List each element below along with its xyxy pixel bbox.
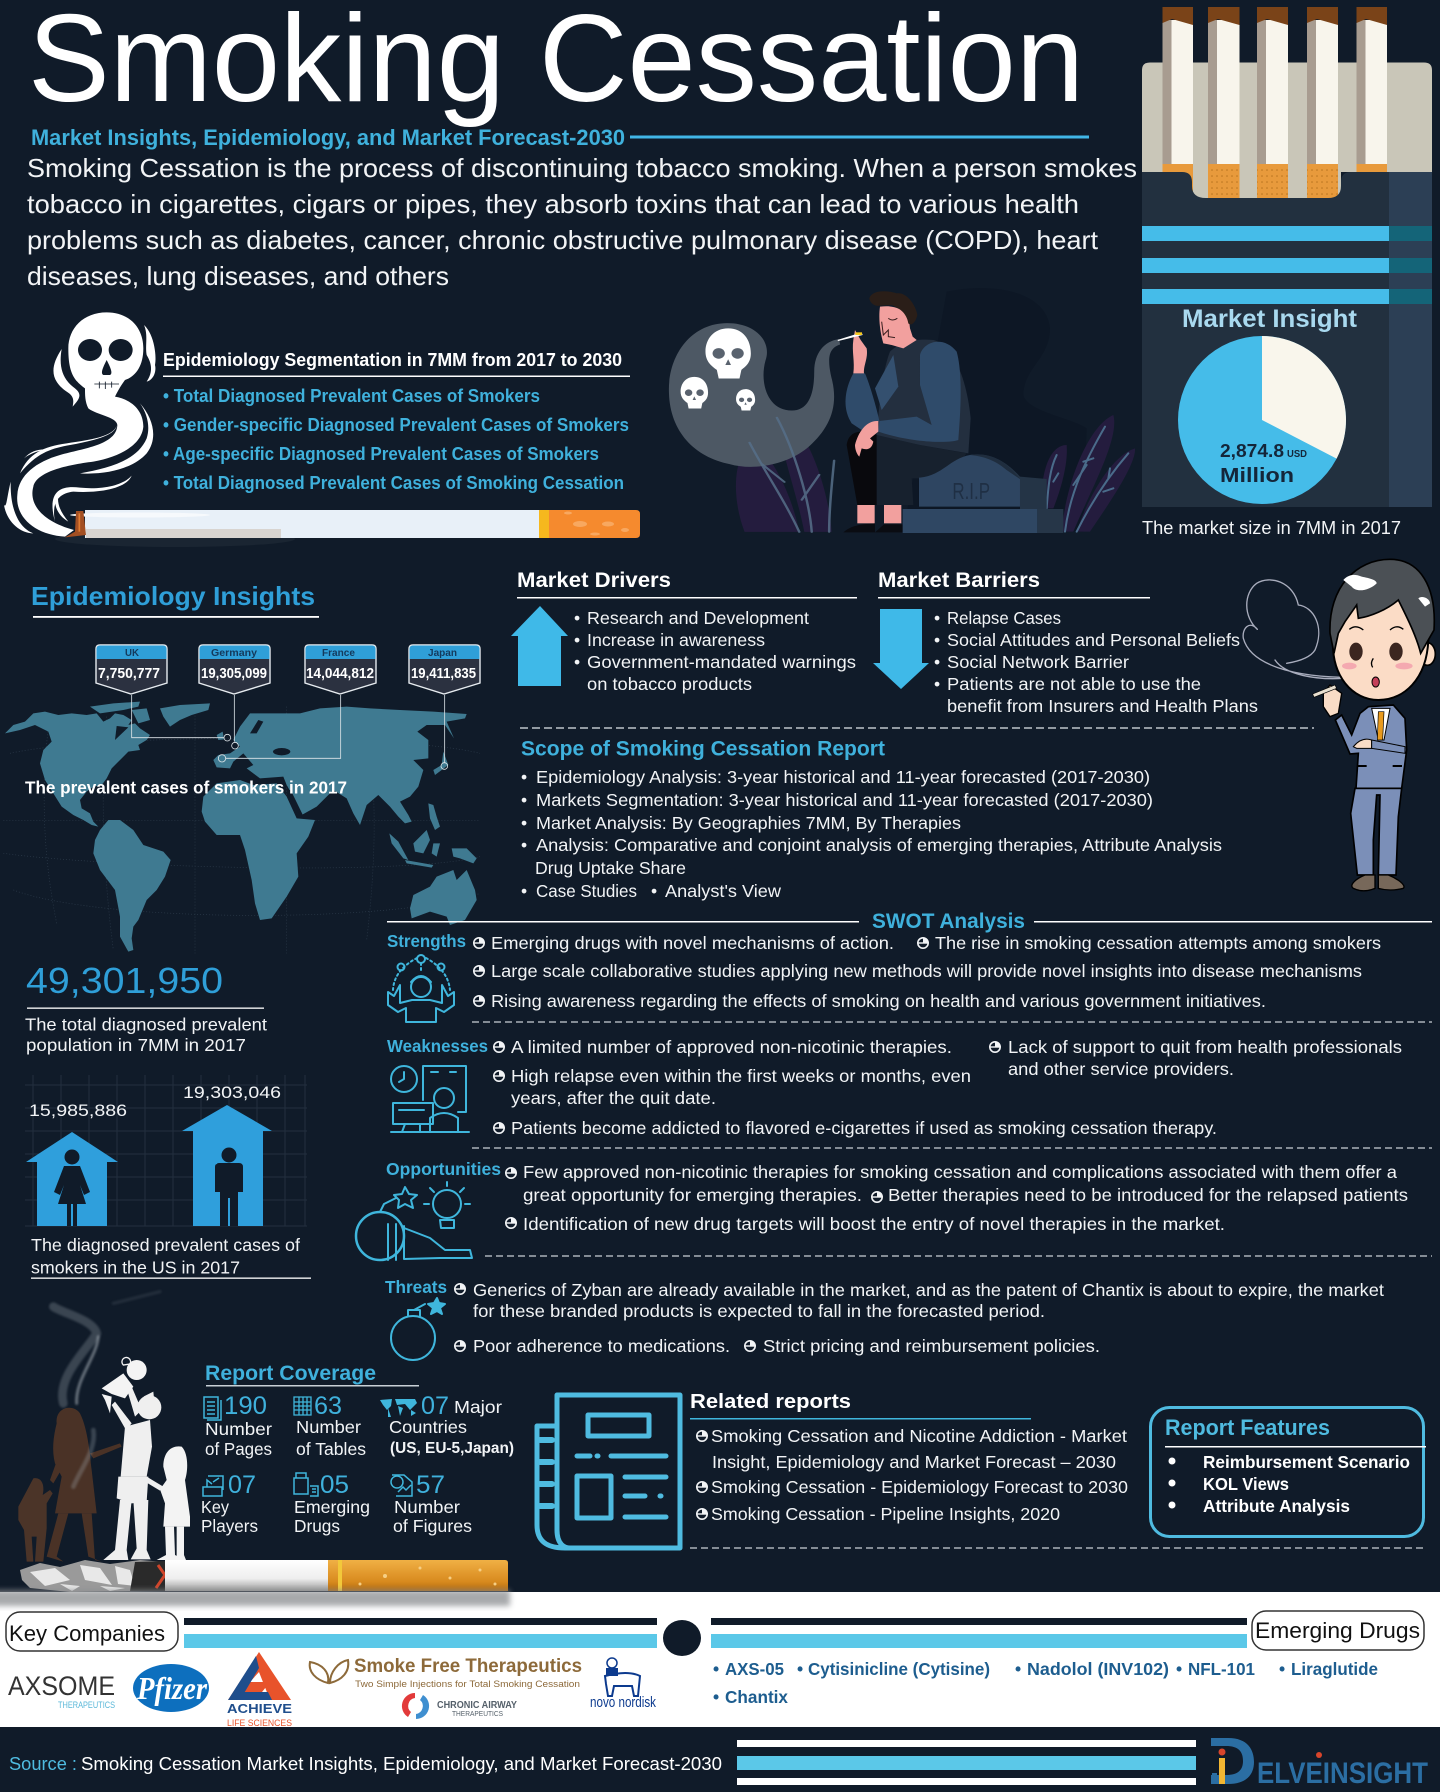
divider bars: [184, 1618, 1247, 1656]
logo: Achieve: ACHIEVE: [227, 1701, 292, 1716]
panel: threats: Threats: [385, 1277, 447, 1297]
list: related reports: [697, 1426, 1128, 1524]
list: scope of report: •: [521, 881, 527, 901]
callout: UK: 7,750,777: [98, 666, 160, 682]
list: scope of report: Epidemiology Analysis: 3-year historical and 11-year forecasted (2017-2030): [536, 767, 1150, 787]
stat: tables: [294, 1392, 366, 1459]
panel: threats: for these branded products is expected to fall in the forecasted period.: [473, 1301, 1045, 1321]
stat: key players: Players: [201, 1516, 258, 1536]
callout: Japan: 19,411,835: [411, 666, 476, 682]
stat: emerging drugs: Drugs: [294, 1516, 340, 1536]
callout: Germany: [199, 645, 270, 694]
stat: key players: [201, 1471, 258, 1536]
list: epidemiology segments: • Age-specific Diagnosed Prevalent Cases of Smokers: [163, 443, 599, 464]
list: scope of report: •: [521, 835, 527, 855]
stat: countries: Major: [454, 1397, 502, 1417]
panel: report features: Reimbursement Scenario: [1203, 1452, 1410, 1472]
list: market barriers: •: [934, 630, 940, 650]
stat: figures: 57: [416, 1471, 445, 1499]
stat: emerging drugs: Emerging: [294, 1497, 370, 1517]
stat: pages: Number: [205, 1419, 272, 1439]
list: market barriers: •: [934, 674, 940, 694]
panel: threats: [385, 1277, 1384, 1360]
subtitle: [31, 125, 1089, 150]
panel: opportunities: Identification of new drug targets will boost the entry of novel therapies in the market.: [523, 1214, 1225, 1234]
tombstone: [903, 454, 1063, 533]
list: related reports: Insight, Epidemiology and Market Forecast – 2030: [712, 1452, 1116, 1472]
stat: countries: 07: [421, 1392, 449, 1420]
stat: total diagnosed population: [25, 960, 267, 1055]
map caption: The prevalent cases of smokers in 2017: [25, 778, 347, 798]
caption: gender chart: smokers in the US in 2017: [31, 1258, 240, 1278]
list: scope of report: •: [651, 881, 657, 901]
callout: France: 14,044,812: [306, 666, 374, 682]
callout: France: [305, 645, 376, 694]
panel: weaknesses: A limited number of approved non-nicotinic therapies.: [511, 1037, 952, 1057]
logo: Chronic Airway: [402, 1693, 517, 1719]
stat: tables: Number: [296, 1417, 361, 1437]
grid behind gender chart: [25, 1075, 307, 1226]
caption: market size: The market size in 7MM in 2017: [1142, 518, 1401, 538]
logo: Chronic Airway: CHRONIC AIRWAY: [437, 1699, 517, 1711]
illustration: man at grave: [837, 288, 1135, 533]
heading: report coverage: Report Coverage: [205, 1362, 376, 1385]
panel: opportunities: Opportunities: [386, 1159, 501, 1179]
label: key companies: Key Companies: [9, 1621, 165, 1646]
father: [103, 1387, 163, 1560]
stat: emerging drugs: 05: [320, 1471, 349, 1499]
logo: Pfizer: Pfizer: [136, 1670, 207, 1706]
icon: skull smoke: [4, 312, 156, 537]
label: emerging drugs: Emerging Drugs: [1255, 1618, 1420, 1643]
panel: strengths: Emerging drugs with novel mechanisms of action.: [491, 933, 894, 953]
panel: weaknesses: Weaknesses: [387, 1036, 488, 1056]
heading: epidemiology insights: Epidemiology Insights: [31, 581, 315, 611]
source: Smoking Cessation Market Insights, Epidemiology, and Market Forecast-2030: [81, 1754, 722, 1774]
panel: threats: Generics of Zyban are already available in the market, and as the patent of Chantix is about to expire, the market: [473, 1280, 1384, 1300]
stat: countries: (US, EU-5,Japan): [390, 1440, 514, 1457]
list: scope of report: Markets Segmentation: 3-year historical and 11-year forecasted (2017-2030): [536, 790, 1153, 810]
list: market drivers: Increase in awareness: [587, 630, 765, 650]
illustration: cartoon smoker: [1243, 559, 1435, 891]
callout: Japan: Japan: [428, 648, 457, 659]
callout: UK: UK: [125, 648, 140, 659]
list: market drivers: •: [574, 608, 580, 628]
chart: male smokers: 19,303,046: [183, 1083, 281, 1102]
illustration: smoke ghost with skulls: [669, 323, 840, 532]
heading: SWOT: SWOT Analysis: [872, 910, 1025, 933]
heading: epidemiology segmentation: Epidemiology Segmentation in 7MM from 2017 to 2030: [163, 350, 622, 370]
pie chart: market size: 2,874.8: [1220, 441, 1284, 461]
panel: opportunities: [356, 1159, 1408, 1260]
panel: weaknesses: and other service providers.: [1008, 1059, 1234, 1079]
source: Source :: [9, 1754, 77, 1774]
panel: report features: KOL Views: [1203, 1474, 1289, 1494]
panel: strengths: Rising awareness regarding the effects of smoking on health and various government initiatives.: [491, 991, 1266, 1011]
logo: Chronic Airway: THERAPEUTICS: [452, 1711, 503, 1718]
callout: UK: [96, 645, 167, 694]
list: emerging drugs: Cytisinicline (Cytisine): [808, 1659, 990, 1679]
heading: market drivers: Market Drivers: [517, 569, 671, 592]
stat: countries: [380, 1392, 514, 1457]
smoke: [53, 1292, 160, 1487]
callout: France: France: [322, 648, 355, 659]
stat: pages: [204, 1392, 272, 1459]
stat: total diagnosed population: The total diagnosed prevalent: [25, 1014, 267, 1034]
list: scope of report: •: [521, 767, 527, 787]
callout: Japan: [409, 645, 480, 694]
tombstone: R.I.P: [952, 478, 990, 504]
list: emerging drugs: Chantix: [725, 1687, 788, 1707]
caption: gender chart: The diagnosed prevalent cases of: [31, 1235, 300, 1255]
stat: total diagnosed population: 49,301,950: [26, 960, 223, 1001]
list: epidemiology segments: [163, 385, 629, 493]
panel: report features: Report Features: [1165, 1415, 1330, 1440]
list: scope of report: Case Studies: [536, 881, 637, 901]
icon: up arrow: [511, 606, 568, 686]
list: market drivers: [574, 608, 856, 694]
logo: Axsome: THERAPEUTICS: [58, 1700, 115, 1710]
chart: female smokers: [26, 1101, 127, 1226]
pie chart: market size: Million: [1220, 465, 1294, 487]
panel: strengths: Strengths: [387, 931, 466, 951]
woman silhouette: [47, 1408, 122, 1562]
intro paragraph: diseases, lung diseases, and others: [27, 261, 449, 291]
intro paragraph: Smoking Cessation is the process of discontinuing tobacco smoking. When a person smokes: [27, 153, 1137, 183]
list: related reports: Smoking Cessation - Epidemiology Forecast to 2030: [711, 1477, 1128, 1497]
list: emerging drugs: [713, 1659, 1378, 1707]
panel: threats: Poor adherence to medications.: [473, 1336, 730, 1356]
list: market barriers: •: [934, 652, 940, 672]
panel: strengths: Large scale collaborative studies applying new methods will provide novel insights into disease mechanisms: [491, 961, 1362, 981]
panel: threats: Strict pricing and reimbursement policies.: [763, 1336, 1100, 1356]
logo: Novo Nordisk: [590, 1658, 656, 1711]
connector lines: [132, 695, 448, 769]
subtitle: Market Insights, Epidemiology, and Market Forecast-2030: [31, 125, 625, 150]
list: related reports: Smoking Cessation and Nicotine Addiction - Market: [711, 1426, 1127, 1446]
icon: down arrow: [873, 609, 929, 689]
list: market drivers: Research and Development: [587, 608, 809, 628]
icon: bomb: [391, 1298, 445, 1360]
pie chart: market size: USD: [1287, 449, 1307, 460]
stat: figures: of Figures: [393, 1516, 472, 1536]
stat: tables: 63: [314, 1392, 342, 1420]
stat: countries: Countries: [389, 1417, 467, 1437]
list: scope of report: Analysis: Comparative and conjoint analysis of emerging therapies, Attribute Analysis: [536, 835, 1222, 855]
label: key companies: [6, 1612, 178, 1651]
panel: weaknesses: High relapse even within the first weeks or months, even: [511, 1066, 971, 1086]
list: emerging drugs: AXS-05: [725, 1659, 784, 1679]
stat: figures: [391, 1471, 472, 1536]
cigarette shadow: [0, 1590, 510, 1606]
icon: weaknesses: [391, 1066, 469, 1132]
list: emerging drugs: Nadolol (INV102): [1027, 1659, 1169, 1679]
chart: female smokers: 15,985,886: [29, 1101, 127, 1120]
stat: key players: Key: [201, 1497, 229, 1517]
logo: Novo Nordisk: novo nordisk: [590, 1694, 656, 1711]
heading: related reports: Related reports: [690, 1390, 851, 1413]
list: emerging drugs: NFL-101: [1188, 1659, 1255, 1679]
girl: [157, 1446, 190, 1560]
chart: male smokers: [182, 1083, 281, 1226]
list: scope of report: Market Analysis: By Geographies 7MM, By Therapies: [536, 813, 961, 833]
panel: strengths: The rise in smoking cessation attempts among smokers: [935, 933, 1381, 953]
list: market barriers: benefit from Insurers and Health Plans: [947, 696, 1258, 716]
panel: opportunities: great opportunity for emerging therapies.: [523, 1185, 862, 1205]
panel: weaknesses: years, after the quit date.: [511, 1088, 716, 1108]
list: scope of report: Drug Uptake Share: [535, 858, 686, 878]
list: emerging drugs: •: [713, 1687, 719, 1707]
icon: newspaper: [537, 1395, 680, 1548]
illustration: family and smoke: [18, 1292, 190, 1562]
list: market barriers: Patients are not able to use the: [947, 674, 1201, 694]
list: emerging drugs: •: [713, 1659, 719, 1679]
list: market barriers: Social Attitudes and Personal Beliefs: [947, 630, 1240, 650]
callout: Germany: Germany: [211, 648, 257, 659]
list: epidemiology segments: • Total Diagnosed Prevalent Cases of Smoking Cessation: [163, 472, 624, 493]
logo: Axsome: AXSOME: [8, 1671, 115, 1701]
list: market barriers: Relapse Cases: [947, 608, 1061, 628]
intro paragraph: tobacco in cigarettes, cigars or pipes, they absorb toxins that can lead to various health: [27, 189, 1079, 219]
bottom cigarette: [20, 1560, 508, 1592]
illustration: cigarette pack: [1142, 7, 1432, 507]
list: emerging drugs: •: [797, 1659, 803, 1679]
list: scope of report: •: [521, 790, 527, 810]
panel: report features: [1150, 1408, 1426, 1536]
logo: Smoke Free Therapeutics: Two Simple Injections for Total Smoking Cessation: [355, 1679, 580, 1689]
callout: Germany: 19,305,099: [201, 666, 267, 682]
list: emerging drugs: Liraglutide: [1291, 1659, 1378, 1679]
list: market drivers: •: [574, 630, 580, 650]
baby: [102, 1357, 147, 1413]
stat: key players: 07: [228, 1471, 256, 1499]
list: emerging drugs: •: [1015, 1659, 1021, 1679]
list: market drivers: •: [574, 652, 580, 672]
smoke cloud: [1243, 580, 1358, 679]
white band: [0, 1592, 1440, 1727]
list: scope of report: •: [521, 813, 527, 833]
panel: opportunities: Better therapies need to be introduced for the relapsed patients: [888, 1185, 1408, 1205]
list: emerging drugs: •: [1176, 1659, 1182, 1679]
panel: strengths: [387, 931, 1381, 1022]
pie chart: market size: [1178, 336, 1346, 504]
list: scope of report: Analyst's View: [665, 881, 781, 901]
stat: total diagnosed population: population in 7MM in 2017: [26, 1035, 246, 1055]
heading: market barriers: Market Barriers: [878, 569, 1040, 592]
world map: [3, 695, 480, 953]
logo: DelveInsight: [1211, 1738, 1428, 1790]
logo: Pfizer: [133, 1664, 209, 1712]
logo: Smoke Free Therapeutics: [310, 1656, 582, 1689]
stat: emerging drugs: [294, 1471, 370, 1536]
list: market drivers: Government-mandated warnings: [587, 652, 856, 672]
icon: top cigarette: [55, 510, 640, 547]
icon: strengths: [388, 955, 454, 1022]
logo: Achieve: LIFE SCIENCES: [227, 1718, 292, 1728]
list: emerging drugs: •: [1279, 1659, 1285, 1679]
list: epidemiology segments: • Total Diagnosed Prevalent Cases of Smokers: [163, 385, 540, 406]
list: market drivers: on tobacco products: [587, 674, 752, 694]
panel: weaknesses: Patients become addicted to flavored e-cigarettes if used as smoking cessation therapy.: [511, 1118, 1217, 1138]
icon: opportunities: [356, 1182, 472, 1260]
footer bars: [737, 1740, 1196, 1785]
logo: Smoke Free Therapeutics: Smoke Free Therapeutics: [354, 1656, 582, 1677]
panel: report features: Attribute Analysis: [1203, 1496, 1350, 1516]
heading: market insight: Market Insight: [1182, 305, 1358, 333]
logo: Achieve: [227, 1652, 292, 1728]
list: market barriers: Social Network Barrier: [947, 652, 1129, 672]
list: market barriers: •: [934, 608, 940, 628]
panel: opportunities: Few approved non-nicotinic therapies for smoking cessation and complications associated with them offer a: [523, 1162, 1397, 1182]
stat: tables: of Tables: [296, 1439, 366, 1459]
stat: pages: 190: [224, 1392, 267, 1420]
panel: weaknesses: [387, 1036, 1402, 1138]
list: scope of report: [521, 767, 1222, 901]
list: market barriers: [934, 608, 1258, 716]
intro paragraph: [27, 153, 1137, 291]
child silhouette: [18, 1478, 53, 1562]
intro paragraph: problems such as diabetes, cancer, chronic obstructive pulmonary disease (COPD), heart: [27, 225, 1099, 255]
list: related reports: Smoking Cessation - Pipeline Insights, 2020: [711, 1504, 1060, 1524]
heading: scope of report: Scope of Smoking Cessation Report: [521, 738, 885, 760]
stat: pages: of Pages: [205, 1439, 272, 1459]
stat: figures: Number: [394, 1497, 460, 1517]
list: epidemiology segments: • Gender-specific Diagnosed Prevalent Cases of Smokers: [163, 414, 629, 435]
panel: weaknesses: Lack of support to quit from health professionals: [1008, 1037, 1402, 1057]
label: emerging drugs: [1252, 1611, 1424, 1650]
caption: gender chart: [31, 1235, 311, 1279]
